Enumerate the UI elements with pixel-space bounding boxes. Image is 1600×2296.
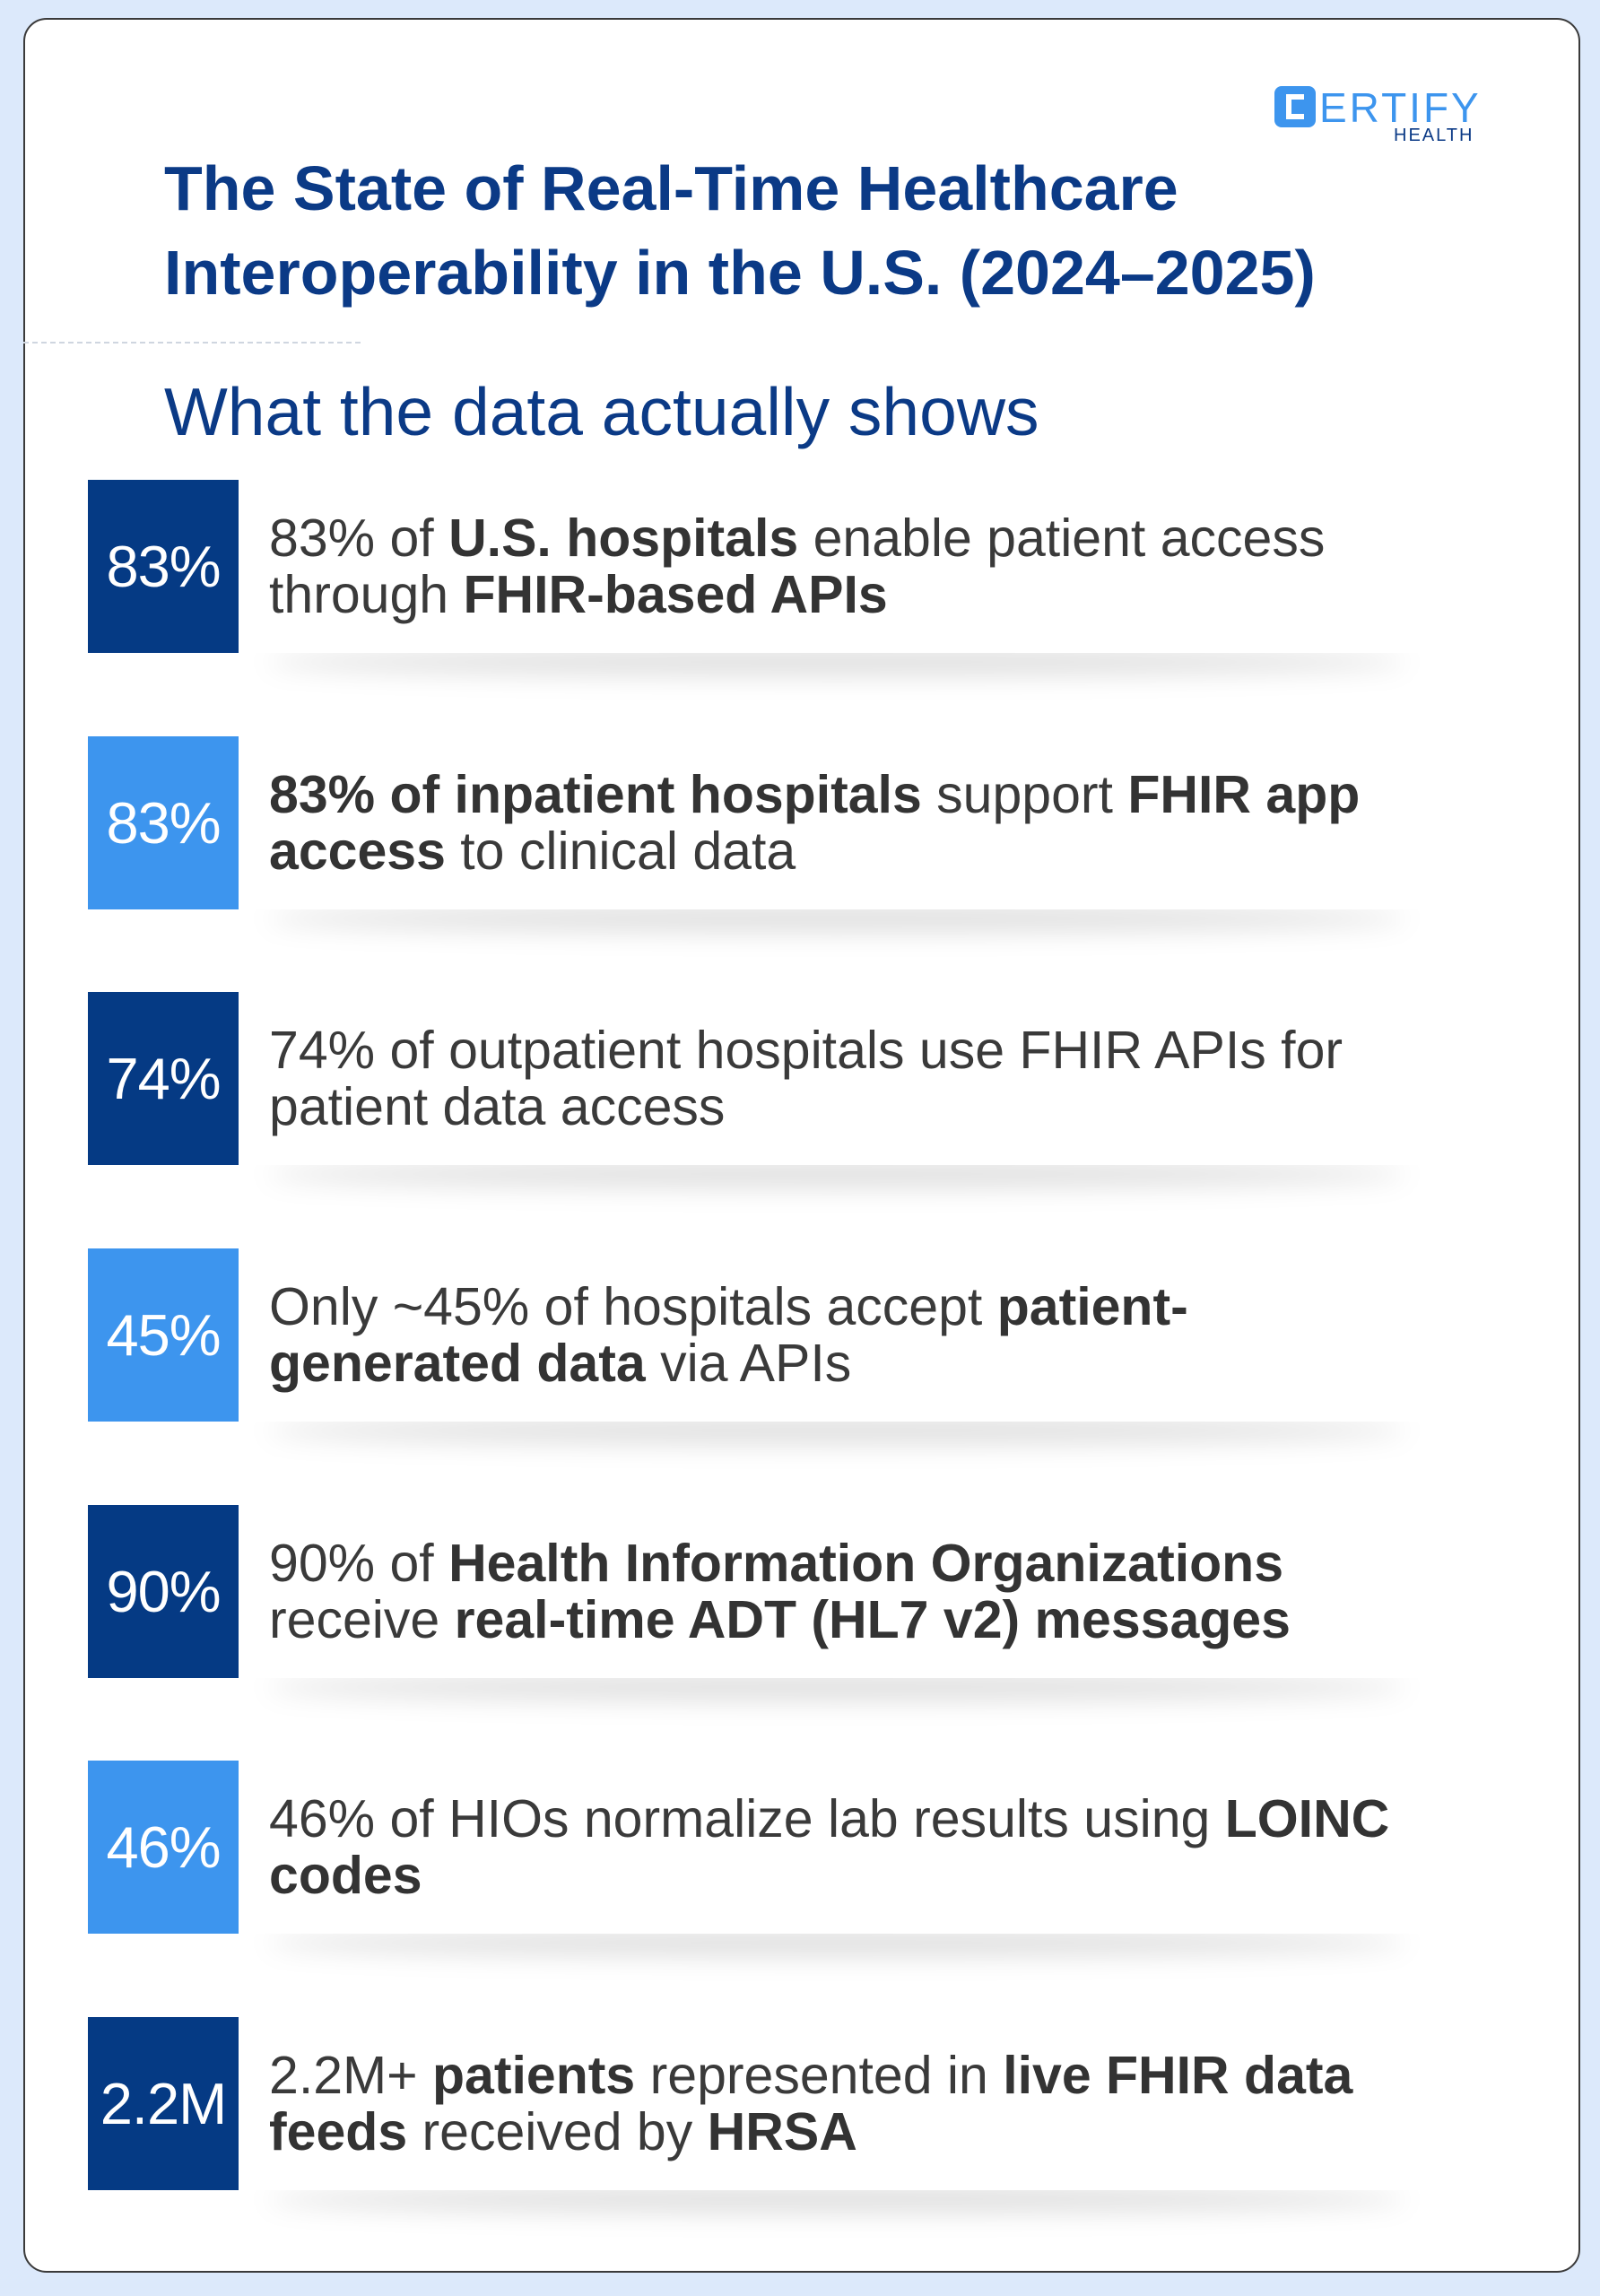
row 4 [88, 1248, 1378, 1452]
row 6: 46% [106, 1814, 221, 1880]
row 4: 45% [106, 1302, 221, 1368]
row 3: 74% of outpatient hospitals use FHIR APIs for [269, 1021, 1343, 1080]
subtitle: What the data actually shows [164, 374, 1039, 449]
row 1: 83% of U.S. hospitals enable patient access [269, 508, 1325, 567]
row 3: 74% [106, 1046, 221, 1111]
logo [1274, 84, 1482, 144]
row 2: 83% [106, 790, 221, 856]
row 6 [88, 1761, 1389, 1964]
title: Interoperability in the U.S. (2024–2025) [164, 238, 1316, 308]
row 3: patient data access [269, 1076, 725, 1135]
row 1: 83% [106, 534, 221, 599]
row 6: 46% of HIOs normalize lab results using LOINC [269, 1788, 1389, 1848]
row 7 [88, 2017, 1378, 2221]
row 1 [88, 480, 1378, 683]
row 2 [88, 736, 1378, 940]
row 4: Only ~45% of hospitals accept patient- [269, 1277, 1188, 1336]
row 3 [88, 992, 1378, 1196]
row 5 [88, 1505, 1378, 1709]
row 6: codes [269, 1846, 422, 1905]
row 1: through FHIR-based APIs [269, 565, 888, 624]
row 4: generated data via APIs [269, 1333, 851, 1392]
title [164, 153, 1316, 308]
row 2: 83% of inpatient hospitals support FHIR app [269, 764, 1360, 823]
logo: ERTIFY [1319, 84, 1482, 131]
row 5: 90% [106, 1559, 221, 1624]
row 5: receive real-time ADT (HL7 v2) messages [269, 1589, 1291, 1648]
row 5: 90% of Health Information Organizations [269, 1534, 1283, 1593]
row 2: access to clinical data [269, 822, 796, 881]
title: The State of Real-Time Healthcare [164, 153, 1178, 223]
row 7: feeds received by HRSA [269, 2102, 857, 2161]
row 7: 2.2M+ patients represented in live FHIR data [269, 2045, 1352, 2104]
row 7: 2.2M [100, 2071, 226, 2136]
